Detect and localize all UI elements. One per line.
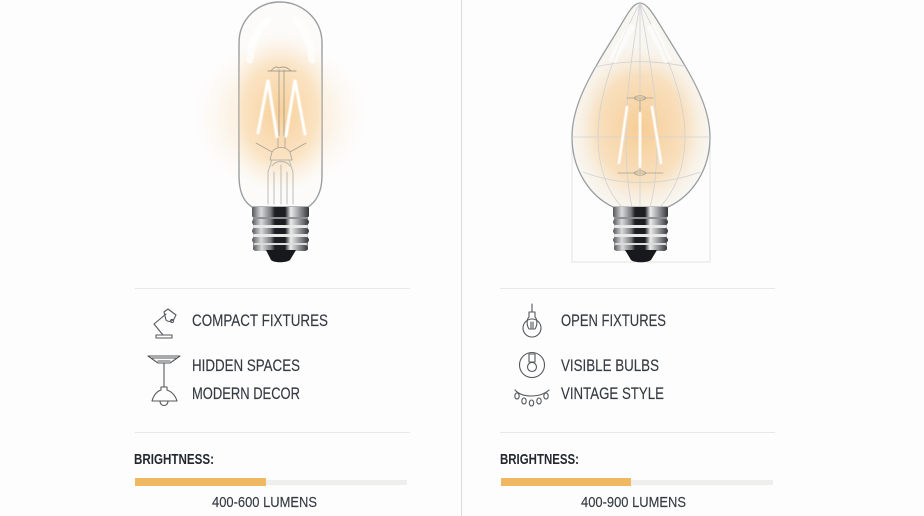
bulb glow	[194, 40, 366, 192]
text: visible bulbs: VISIBLE BULBS	[561, 357, 659, 375]
track	[501, 480, 773, 485]
panel: tubular bulb	[210, 1, 350, 262]
text: open fixtures: OPEN FIXTURES	[561, 312, 666, 330]
icon: filament	[618, 96, 663, 175]
value: lumens: 400-600 LUMENS	[212, 494, 317, 511]
panel divider	[460, 0, 462, 516]
text: modern decor: MODERN DECOR	[192, 385, 300, 403]
icon: hanging bulb	[523, 304, 541, 337]
text: compact fixtures: COMPACT FIXTURES	[192, 312, 328, 330]
frame outline	[572, 137, 710, 262]
icon: teardrop glass	[572, 3, 710, 210]
text: hidden spaces: HIDDEN SPACES	[192, 357, 300, 375]
right brightness meter	[500, 451, 773, 511]
icon: desk lamp	[154, 309, 176, 338]
left brightness meter	[134, 451, 407, 511]
icon: string lights	[515, 390, 549, 406]
icon: pendant lamp	[148, 356, 180, 406]
icon: visible bulb	[520, 352, 544, 378]
panel: teardrop bulb	[572, 3, 710, 262]
text: vintage style: VINTAGE STYLE	[561, 385, 664, 403]
value: lumens: 400-900 LUMENS	[581, 494, 686, 511]
track	[135, 480, 407, 485]
fill	[135, 478, 266, 486]
left features panel	[135, 288, 410, 432]
icon: screw base	[613, 207, 668, 262]
right features panel	[500, 288, 775, 432]
label: brightness: BRIGHTNESS:	[134, 451, 214, 468]
fill	[501, 478, 631, 486]
label: brightness: BRIGHTNESS:	[500, 451, 579, 468]
icon: screw base	[252, 207, 309, 262]
icon: tubular glass	[238, 1, 323, 208]
icon: filament	[256, 67, 306, 204]
